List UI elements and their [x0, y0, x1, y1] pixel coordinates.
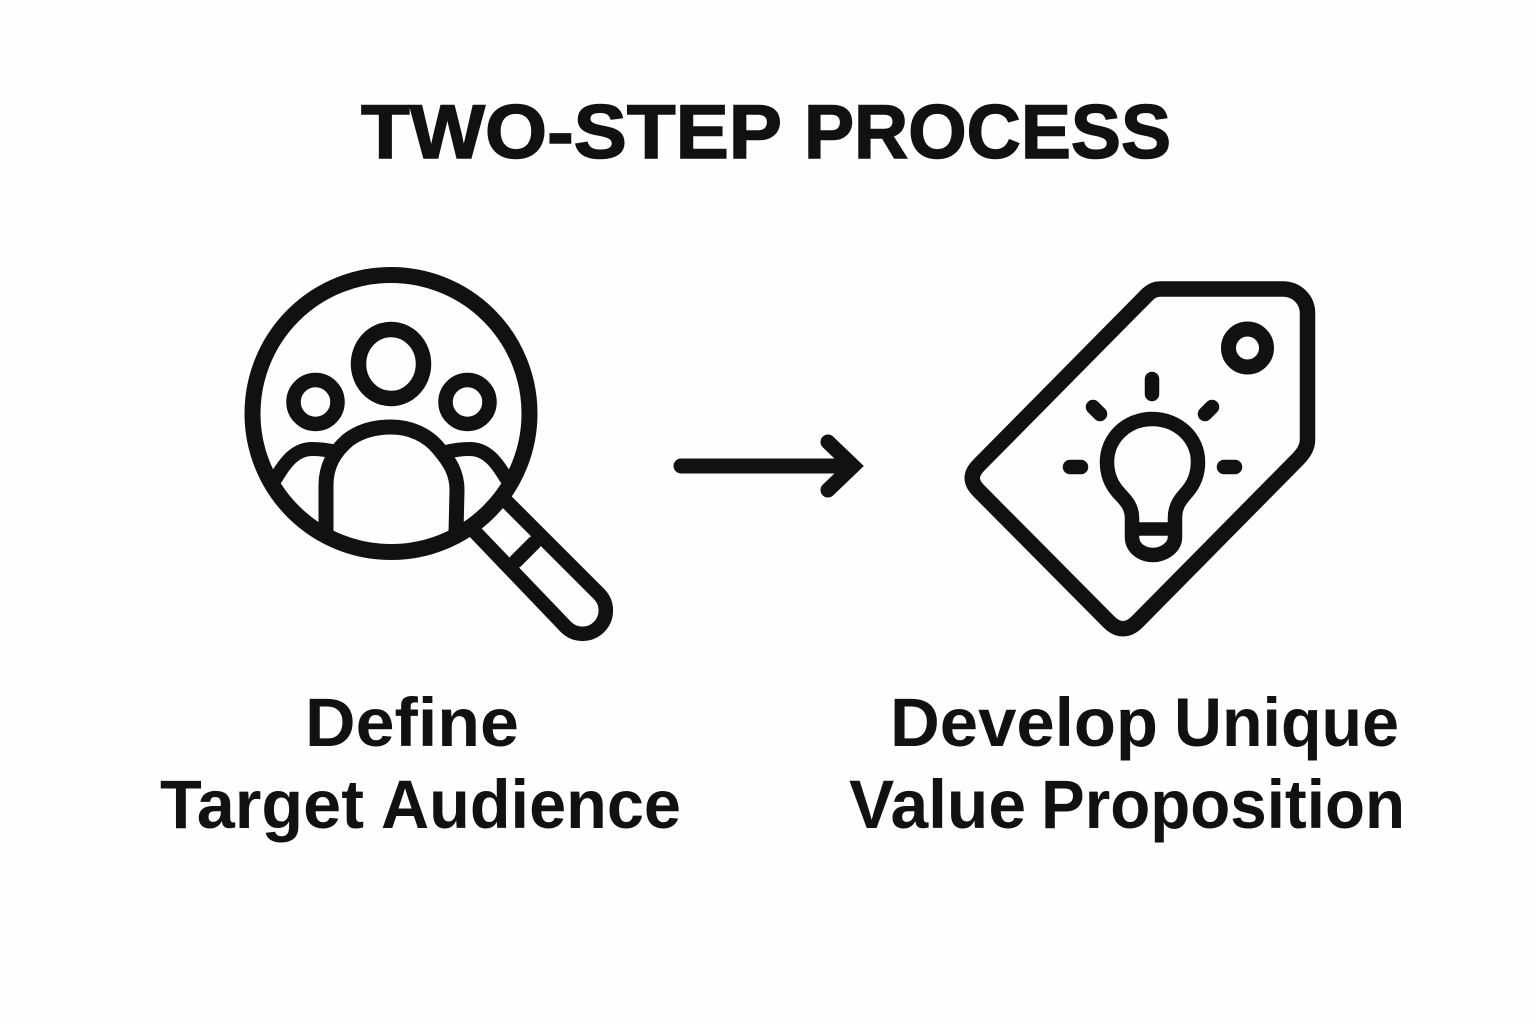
- title: PROCESS: [804, 90, 1171, 175]
- label: step 2: Value: [849, 766, 1026, 843]
- label: step 2: Unique: [1174, 684, 1399, 761]
- light bulb: [1107, 419, 1198, 555]
- tag outline: [972, 289, 1308, 629]
- label: step 1: Audience: [381, 766, 681, 843]
- light rays: [1070, 379, 1235, 467]
- tag hole: [1228, 329, 1266, 367]
- icon: price tag with light bulb: [972, 289, 1308, 629]
- person: back centre head: [358, 330, 424, 398]
- magnifier handle: [476, 502, 606, 634]
- icon: magnifying glass over audience: [252, 275, 606, 634]
- title: TWO-STEP: [361, 90, 782, 175]
- label: step 1: Target: [160, 766, 364, 843]
- arrow: [681, 442, 853, 490]
- person: right shoulders: [446, 449, 506, 478]
- label: step 2: Proposition: [1041, 766, 1405, 843]
- person: right head: [446, 380, 490, 424]
- person: front centre body: [326, 427, 457, 535]
- label: step 2: [849, 684, 1405, 843]
- person: left head: [294, 380, 338, 424]
- person: left shoulders: [276, 449, 336, 478]
- label: step 1: [160, 684, 681, 843]
- label: step 2: Develop: [890, 684, 1158, 761]
- magnifier lens ring: [252, 275, 530, 552]
- title: [361, 90, 1171, 175]
- label: step 1: Define: [305, 684, 519, 761]
